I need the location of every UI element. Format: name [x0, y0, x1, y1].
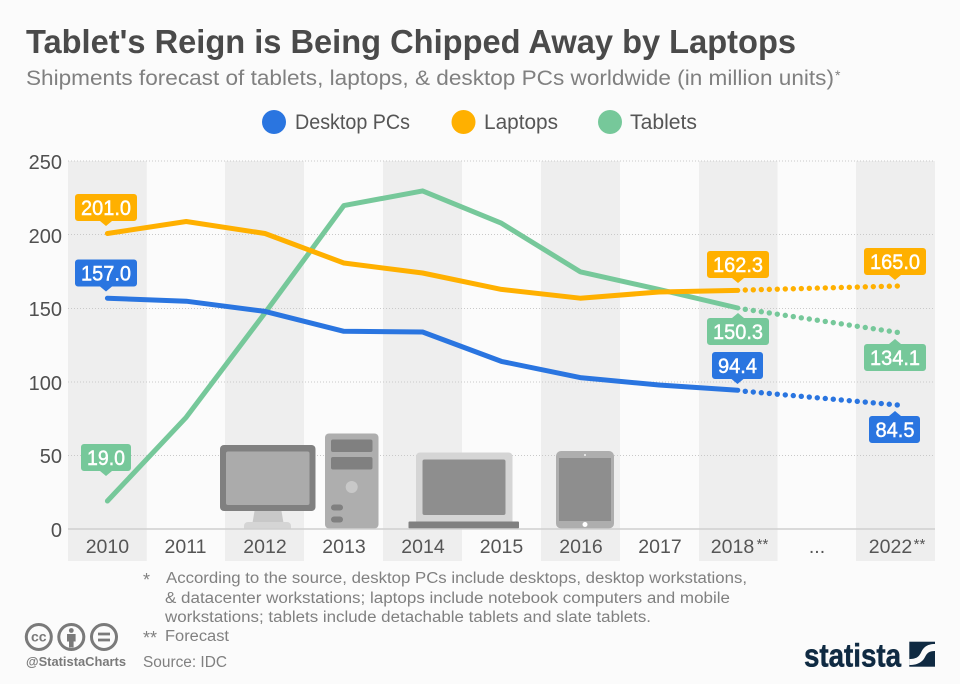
label: desktop 2022: 84.5 — [876, 419, 914, 442]
icon: desktop tower — [325, 434, 378, 528]
label: tablets 2022: 134.1 — [870, 347, 920, 370]
x axis labels: 2022 — [869, 536, 912, 558]
subtitle: Shipments forecast of tablets, laptops, & desktop PCs worldwide (in million units) — [26, 67, 834, 90]
icon: attribution — [59, 624, 84, 650]
y axis labels — [29, 152, 62, 542]
icon: laptop — [408, 452, 519, 528]
y axis labels: 250 — [29, 152, 62, 174]
legend: tablets: Tablets — [630, 110, 697, 134]
icon: creative commons: cc — [31, 628, 47, 644]
footnotes: Forecast — [165, 628, 230, 645]
line: tablets — [107, 191, 898, 501]
y axis labels: 100 — [29, 373, 62, 395]
x axis labels: 2013 — [322, 536, 366, 558]
label: tablets 2022 — [864, 339, 926, 371]
label: laptops 2018 — [707, 251, 769, 283]
social handle: @StatistaCharts — [26, 655, 126, 669]
x axis labels: 2018 — [711, 536, 754, 558]
legend: desktop PCs: Desktop PCs — [295, 110, 410, 134]
x axis labels: 2010 — [86, 536, 129, 558]
x axis labels — [86, 536, 925, 558]
label: tablets 2018: 150.3 — [713, 321, 763, 344]
footnotes: * — [143, 570, 150, 590]
label: laptops 2022 — [864, 248, 926, 280]
title: Tablet's Reign is Being Chipped Away by Laptops — [26, 24, 796, 61]
license icons — [26, 624, 116, 650]
legend: laptops — [452, 110, 558, 134]
label: desktop 2018 — [712, 352, 763, 384]
subtitle footnote asterisk: * — [835, 67, 841, 83]
y axis labels: 0 — [51, 520, 62, 542]
label: tablets 2018 — [707, 313, 769, 345]
x axis labels: 2011 — [165, 536, 206, 558]
footnotes: According to the source, desktop PCs include desktops, desktop workstations, — [166, 570, 747, 587]
y axis labels: 150 — [29, 299, 62, 321]
x axis labels: 2017 — [638, 536, 682, 558]
legend: tablets — [598, 110, 697, 134]
x axis labels: 2012 — [243, 536, 287, 558]
label: laptops 2018: 162.3 — [713, 254, 763, 277]
label: tablets 2010 — [81, 444, 131, 476]
label: tablets 2010: 19.0 — [87, 447, 125, 470]
footnotes — [143, 570, 747, 671]
statista logo: statista — [804, 638, 901, 674]
label: laptops 2010: 201.0 — [81, 197, 131, 220]
x axis labels: ** — [914, 536, 925, 553]
label: desktop 2018: 94.4 — [718, 355, 757, 378]
legend — [262, 110, 697, 134]
x axis line — [68, 528, 935, 530]
footnotes: & datacenter workstations; laptops include notebook computers and mobile — [165, 590, 730, 607]
x axis labels: 2015 — [480, 536, 523, 558]
label: desktop 2022 — [869, 411, 920, 443]
label: desktop 2010 — [75, 260, 137, 292]
chart background bands — [68, 161, 935, 561]
x axis labels: ... — [809, 536, 825, 558]
footnotes: workstations; tablets include detachable tablets and slate tablets. — [164, 609, 651, 626]
y axis labels: 50 — [40, 446, 62, 468]
data labels — [75, 194, 926, 476]
x axis labels: 2014 — [401, 536, 445, 558]
label: laptops 2022: 165.0 — [870, 251, 920, 274]
icon: tablet — [556, 451, 614, 528]
label: desktop 2010: 157.0 — [81, 262, 131, 286]
x axis labels: ** — [757, 536, 768, 553]
x axis labels: 2016 — [559, 536, 603, 558]
label: laptops 2010 — [75, 194, 137, 226]
line: laptops — [107, 222, 898, 298]
legend: laptops: Laptops — [484, 110, 558, 134]
y axis labels: 200 — [29, 226, 62, 248]
icon: no derivatives — [92, 624, 116, 650]
line: desktop PCs — [107, 298, 898, 405]
footnotes: Source: IDC — [143, 654, 227, 671]
icon: desktop monitor — [220, 445, 316, 529]
footnotes: ** — [143, 628, 157, 648]
